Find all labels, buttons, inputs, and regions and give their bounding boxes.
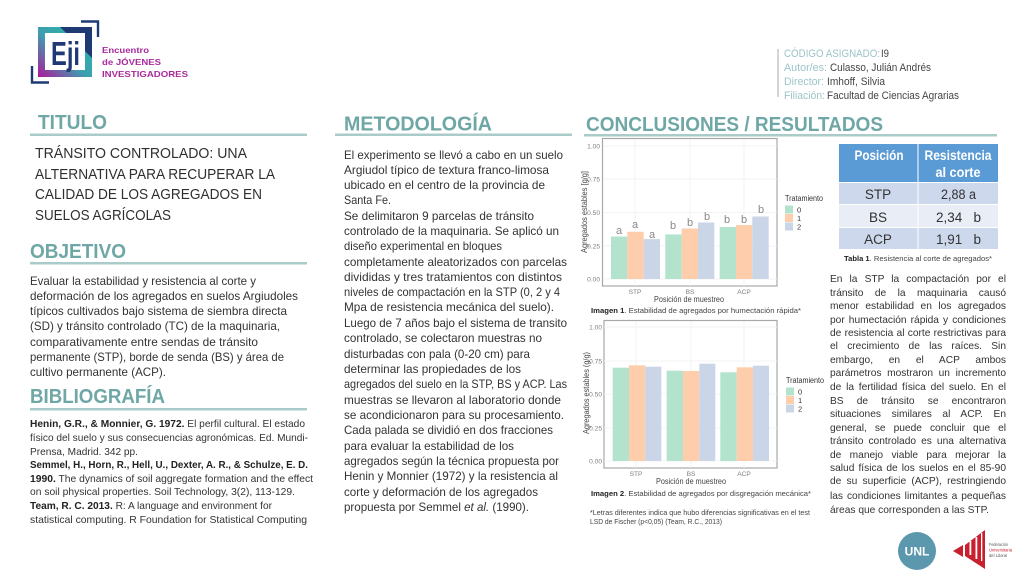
logo: Federación Universitaria del Litoral: Federación — [989, 542, 1008, 547]
text block: references: statistical computing. R Foundation for Statistical Computing — [30, 514, 307, 526]
text block: conclusiones: parámetros mostraron un incremento — [830, 368, 1006, 379]
text block: objetivo: deformación de los agregados en suelos Argiudoles — [30, 289, 298, 303]
text block: objetivo: típicos cultivados bajo sistema de siembra directa — [30, 304, 287, 318]
text block: conclusiones: de su superficie (ACP), restringiendo — [830, 476, 1006, 487]
author information block: Filiación: — [784, 90, 825, 102]
table: resistencia al corte — [839, 144, 998, 249]
text block: metodología: determinar las propiedades de los — [344, 362, 521, 376]
text block: references: Semmel, H., Horn, R., Hell, U., Dexter, A. R., & Schulze, E. D. — [30, 459, 308, 471]
text block: poster title — [35, 145, 275, 224]
text block: poster title: TRÁNSITO CONTROLADO: UNA — [35, 145, 247, 162]
bar chart: Imagen 1 — [579, 138, 823, 304]
text block: conclusiones: de manejo viable para mejorar la — [830, 450, 1006, 461]
text block: conclusiones — [830, 272, 1010, 520]
bar chart: Imagen 2: 0.25 — [589, 426, 602, 432]
logo: Encuentro de Jóvenes Investigadores: Encuentro — [102, 45, 149, 55]
text block: references: Prensa, Madrid. 342 pp. — [30, 446, 138, 458]
bar chart: Imagen 2 — [581, 320, 824, 486]
text block: metodología: controlado, se colectaron muestras no — [344, 331, 542, 345]
bar chart: Imagen 2: 1.00 — [589, 324, 602, 332]
bar chart: Imagen 1: a — [616, 225, 623, 237]
bar chart: Imagen 1: Agregados estables [g/g] — [579, 171, 589, 253]
text block: conclusiones: las condiciones limitantes a pequeñas — [830, 491, 1006, 502]
text block: objetivo — [30, 274, 298, 379]
text block: metodología: disturbadas con pala (0-20 cm) para — [344, 347, 530, 361]
text block: objetivo: comparativamente entre sendas de tránsito — [30, 335, 258, 349]
bar chart: Imagen 1: b — [758, 204, 764, 216]
text block: metodología: Se delimitaron 9 parcelas de tránsito — [344, 209, 534, 223]
bar chart: Imagen 2: Posición de muestreo — [656, 476, 726, 486]
text block: objetivo: cultivo permanente (ACP). — [30, 365, 166, 379]
logo: Encuentro de Jóvenes Investigadores: INVESTIGADORES — [102, 69, 188, 79]
table: resistencia al corte: STP — [865, 187, 891, 202]
logo: Encuentro de Jóvenes Investigadores: de JÓVENES — [102, 56, 161, 67]
text block: poster title: ALTERNATIVA PARA RECUPERAR LA — [35, 166, 275, 183]
footnote: significance — [590, 508, 810, 526]
bar chart: Imagen 2: 1 — [798, 396, 802, 405]
text block: metodología: diseño experimental en bloques — [344, 239, 502, 253]
logo: UNL: UNL — [905, 544, 929, 558]
logo: UNL — [898, 532, 936, 570]
bar chart: Imagen 1: b — [687, 217, 693, 229]
footnote: significance: LSD de Fischer (p<0,05) (Team, R.C., 2013) — [590, 517, 722, 526]
text block: metodología: para evaluar la estabilidad de los — [344, 439, 514, 453]
bar chart: Imagen 2: Tratamiento — [786, 375, 824, 385]
caption: Tabla 1: Tabla 1. Resistencia al corte de agregados* — [844, 254, 992, 263]
bar chart: Imagen 1: 2 — [797, 222, 801, 232]
heading: OBJETIVO: OBJETIVO — [30, 241, 126, 263]
text block: metodología: Argiudol típico de textura franco-limosa — [344, 163, 549, 177]
text block: conclusiones: de la fertilidad física del suelo. En el — [830, 382, 1006, 393]
table: resistencia al corte: 2,34 b — [936, 210, 981, 225]
text block: conclusiones: por humectación rápida y condiciones — [830, 315, 1006, 326]
text block: metodología: completamente aleatorizados con parcelas — [344, 255, 567, 269]
table: resistencia al corte: Posición — [854, 148, 904, 163]
text block: conclusiones: BS de tránsito se encontraron — [830, 396, 1006, 407]
bar chart: Imagen 2: Agregados estables (g/g) — [581, 352, 591, 434]
logo: Encuentro de Jóvenes Investigadores — [32, 22, 188, 82]
table: resistencia al corte: ACP — [864, 232, 892, 247]
bar chart: Imagen 1: 0.75 — [587, 176, 600, 184]
text block: conclusiones: tránsito de la maquinaria causó — [830, 288, 1006, 299]
text block: metodología: divididas y tres tratamientos con distintos — [344, 270, 562, 284]
bar chart: Imagen 1: 0.25 — [587, 244, 600, 250]
bar chart: Imagen 2: 2 — [798, 404, 802, 414]
bar chart: Imagen 1: 0.50 — [587, 210, 600, 217]
author information block: Director: — [784, 76, 824, 88]
text block: metodología: agregados según la técnica propuesta por — [344, 454, 559, 468]
text block: metodología: El experimento se llevó a cabo en un suelo — [344, 148, 563, 162]
text block: objetivo: permanente (STP), borde de senda (BS) y área de — [30, 350, 284, 364]
text block: references: Team, R. C. 2013. R: A language and environment for — [30, 500, 272, 512]
heading: TITULO: TITULO — [38, 112, 107, 134]
text block: conclusiones: tránsito controlado es una alternativa — [830, 436, 1006, 447]
bar chart: Imagen 1: Posición de muestreo — [654, 294, 724, 304]
text block: metodología: corte y deformación de los agregados — [344, 485, 538, 499]
text block: metodología: se acondicionaron para su procesamiento. — [344, 408, 564, 422]
text block: metodología: muestras se llevaron al laboratorio donde — [344, 393, 561, 407]
text block: references: on soil physical properties. Soil Technology, 3(2), 113-129. — [30, 486, 295, 498]
footnote: significance: *Letras diferentes indica que hubo diferencias significativas en el test — [590, 508, 810, 517]
text block: metodología: Mpa de resistencia mecánica del suelo). — [344, 300, 554, 314]
text block: references: 1990. The dynamics of soil aggregate formation and the effect — [30, 473, 313, 485]
bar chart: Imagen 2: STP — [630, 471, 643, 478]
text block: references — [30, 418, 313, 526]
bar chart: Imagen 1: b — [670, 220, 676, 232]
text block: metodología: Luego de 7 años bajo el sistema de transito — [344, 316, 567, 330]
logo: Federación Universitaria del Litoral — [953, 530, 1012, 569]
text block: conclusiones: embargo, en el ACP ambos — [830, 355, 1006, 366]
bar chart: Imagen 1: b — [741, 214, 747, 226]
author information block — [778, 47, 960, 102]
bar chart: Imagen 2: 0.75 — [589, 358, 602, 366]
text block: metodología: Henin y Monnier (1972) y la resistencia al — [344, 469, 558, 483]
text block: objetivo: (SD) y tránsito controlado (TC) de la maquinaria, — [30, 319, 280, 333]
author information block: Imhoff, Silvia — [827, 76, 885, 88]
bar chart: Imagen 2: ACP — [737, 471, 751, 478]
table: resistencia al corte: Resistencia — [924, 148, 992, 163]
logo: Encuentro de Jóvenes Investigadores: Eji — [51, 35, 80, 72]
bar chart: Imagen 2: 0.00 — [589, 458, 602, 466]
text block: metodología — [344, 148, 567, 514]
bar chart: Imagen 1: BS — [686, 289, 695, 296]
bar chart: Imagen 1: a — [632, 219, 639, 231]
table: resistencia al corte: al corte — [936, 165, 981, 180]
heading: BIBLIOGRAFÍA: BIBLIOGRAFÍA — [30, 385, 165, 408]
bar chart: Imagen 1: b — [724, 214, 730, 226]
author information block: Facultad de Ciencias Agrarias — [827, 90, 960, 102]
text block: metodología: controlado de la maquinaria. Se aplicó un — [344, 224, 559, 238]
logo: Federación Universitaria del Litoral: del Litoral — [989, 553, 1007, 558]
bar chart: Imagen 1: STP — [629, 289, 642, 296]
text block: conclusiones: En la STP la compactación por el — [830, 274, 1006, 285]
author information block: Autor/es: — [784, 62, 827, 74]
text block: conclusiones: el crecimiento de las raíces. Sin — [830, 341, 1006, 352]
text block: metodología: Cada palada se dividió en dos fracciones — [344, 423, 553, 437]
text block: conclusiones: menor estabilidad en los agregados — [830, 301, 1006, 312]
bar chart: Imagen 1: 1 — [797, 214, 801, 223]
text block: conclusiones: situaciones similares al ACP. En — [830, 409, 1006, 420]
text block: poster title: SUELOS AGRÍCOLAS — [35, 207, 171, 224]
logo: Federación Universitaria del Litoral: Universitaria — [989, 548, 1012, 552]
text block: metodología: propuesta por Semmel et al. (1990). — [344, 500, 529, 514]
author information block: I9 — [881, 48, 889, 60]
bar chart: Imagen 1: 0.00 — [587, 276, 600, 284]
bar chart: Imagen 1: b — [704, 211, 710, 223]
caption: Imagen 1: Imagen 1. Estabilidad de agregados por humectación rápida* — [591, 306, 801, 315]
text block: conclusiones: salud física de los suelos en el 85-90 — [830, 463, 1006, 474]
bar chart: Imagen 1: a — [649, 229, 656, 241]
bar chart: Imagen 2: 0 — [798, 388, 802, 396]
caption: Imagen 2: Imagen 2. Estabilidad de agregados por disgregación mecánica* — [591, 489, 811, 498]
bar chart: Imagen 1: Tratamiento — [785, 193, 823, 203]
text block: references: físico del suelo y sus consecuencias agronómicas. Ed. Mundi- — [30, 432, 308, 444]
text block: references: Henin, G.R., & Monnier, G. 1972. El perfil cultural. El estado — [30, 418, 305, 430]
text block: conclusiones: de resistencia al corte restrictivas para — [830, 328, 1006, 339]
heading: CONCLUSIONES / RESULTADOS: CONCLUSIONES / RESULTADOS — [586, 114, 883, 136]
text block: metodología: Santa Fe. — [344, 193, 391, 207]
bar chart: Imagen 1: 0 — [797, 206, 801, 214]
table: resistencia al corte: 1,91 b — [936, 232, 981, 247]
text block: conclusiones: general, se puede concluir que el — [830, 423, 1006, 434]
text block: metodología: niveles de compactación en la STP (0, 2 y 4 — [344, 285, 560, 299]
bar chart: Imagen 1: ACP — [737, 289, 751, 296]
table: resistencia al corte: 2,88 a — [941, 187, 976, 202]
bar chart: Imagen 2: 0.50 — [589, 392, 602, 398]
text block: metodología: ubicado en el centro de la provincia de — [344, 178, 545, 192]
text block: poster title: CALIDAD DE LOS AGREGADOS EN — [35, 186, 262, 203]
heading: METODOLOGÍA: METODOLOGÍA — [344, 112, 492, 136]
author information block: Culasso, Julián Andrés — [830, 62, 932, 74]
text block: metodología: agregados del suelo en la STP, BS y ACP. Las — [344, 377, 567, 391]
table: resistencia al corte: BS — [869, 210, 887, 225]
bar chart: Imagen 2: BS — [687, 471, 696, 478]
text block: objetivo: Evaluar la estabilidad y resistencia al corte y — [30, 274, 256, 288]
text block: conclusiones: áreas que corresponden a las STP. — [830, 505, 989, 516]
author information block: CÓDIGO ASIGNADO: — [784, 47, 880, 60]
bar chart: Imagen 1: 1.00 — [587, 144, 600, 150]
